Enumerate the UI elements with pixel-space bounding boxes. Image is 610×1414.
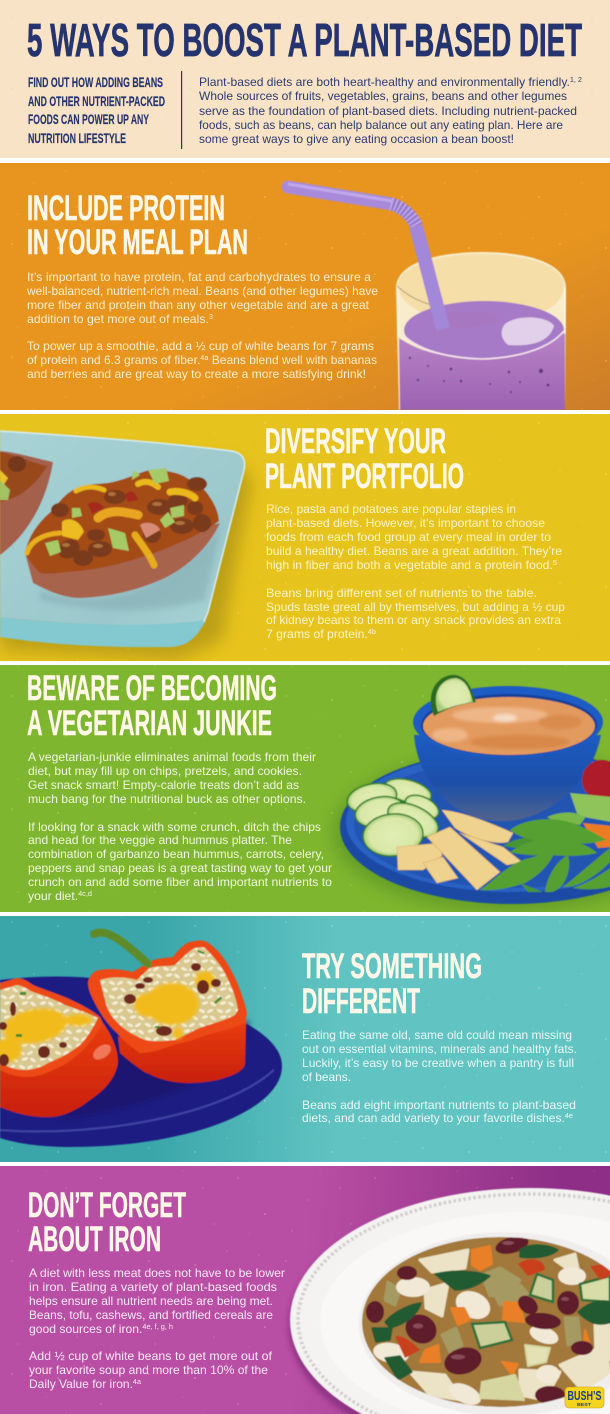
- right sweet potato: [25, 468, 220, 598]
- body text: combination of garbanzo bean hummus, carrots, celery,: [28, 848, 324, 861]
- body text: good sources of iron.: [29, 1323, 137, 1336]
- heading: A VEGETARIAN JUNKIE: [27, 704, 272, 743]
- panel: beware of becoming a vegetarian junkie: [0, 665, 610, 912]
- body text: Spuds taste great all by themselves, but adding a ½ cup: [266, 601, 565, 614]
- heading: PLANT PORTFOLIO: [265, 457, 464, 496]
- body text: A diet with less meat does not have to be lower: [29, 1267, 285, 1280]
- body text: Luckily, it’s easy to be creative when a pantry is full: [302, 1057, 574, 1070]
- body text: 4b: [368, 629, 376, 636]
- body text: and head for the veggie and hummus platter. The: [28, 834, 292, 847]
- body text: of beans.: [302, 1071, 351, 1084]
- body text: more fiber and protein than any other vegetable and are a great: [27, 299, 370, 312]
- left sweet potato: [0, 451, 53, 555]
- body text: diets, and can add variety to your favorite dishes.: [302, 1112, 554, 1125]
- cucumber slices: [345, 774, 443, 859]
- right pepper: [88, 940, 247, 1083]
- panel: try something different: [0, 916, 610, 1162]
- heading: DIFFERENT: [302, 982, 420, 1021]
- body text: [28, 751, 332, 903]
- panel: header: [0, 0, 610, 158]
- intro text: 1, 2: [570, 77, 582, 84]
- body text: Rice, pasta and potatoes are popular staples in: [266, 503, 516, 516]
- heading: [27, 669, 277, 743]
- body text: 4a: [133, 1379, 141, 1386]
- panel: include protein: [0, 163, 610, 410]
- body text: 3: [209, 314, 213, 321]
- panel: don't forget about iron: [0, 1166, 610, 1414]
- subheading: [28, 74, 165, 146]
- body text: Daily Value for iron.: [29, 1378, 129, 1391]
- body text: [302, 1029, 577, 1125]
- body text: of kidney beans to them or any snack provides an extra: [266, 614, 562, 627]
- intro text: serve as the foundation of plant-based diets. Including nutrient-packed: [199, 105, 577, 118]
- pepper stem: [94, 932, 148, 964]
- logo: Bush's Best: BEST: [577, 1402, 591, 1407]
- body text: To power up a smoothie, add a ½ cup of white beans for 7 grams: [27, 340, 374, 353]
- snap peas, celery, carrot and tomato: [480, 760, 610, 892]
- body text: your diet.: [28, 890, 76, 903]
- cucumber garnish: [431, 675, 476, 716]
- body text: 4c,d: [78, 891, 92, 898]
- body text: [26, 271, 378, 381]
- body text: If looking for a snack with some crunch, ditch the chips: [28, 821, 321, 834]
- body text: 4e: [565, 1113, 573, 1120]
- body text: Beans, tofu, cashews, and fortified cereals are: [29, 1309, 273, 1322]
- body text: Beans add eight important nutrients to plant-based: [302, 1099, 576, 1112]
- heading: [28, 1186, 186, 1259]
- intro text: [199, 76, 582, 146]
- illustration: stuffed sweet potatoes on plate: [0, 431, 252, 660]
- illustration: hummus bowl and vegetable platter: [332, 675, 610, 912]
- illustration: berry smoothie with straw: [288, 184, 566, 410]
- left pepper: [0, 978, 118, 1117]
- body text: high in fiber and both a vegetable and a protein food.: [266, 559, 537, 572]
- body text: much bang for the nutritional buck as other options.: [28, 793, 306, 806]
- body text: diet, but may fill up on chips, pretzels, and cookies.: [28, 765, 302, 778]
- panel: diversify your plant portfolio: [0, 414, 610, 661]
- body text: 4a: [200, 355, 208, 362]
- body text: [29, 1267, 285, 1391]
- body text: foods from each food group at every meal in order to: [266, 531, 551, 544]
- intro text: Whole sources of fruits, vegetables, grains, beans and other legumes: [199, 90, 567, 103]
- heading: [27, 189, 248, 262]
- intro text: foods, such as beans, can help balance out any eating plan. Here are: [199, 119, 563, 132]
- subheading: FOODS CAN POWER UP ANY: [28, 111, 149, 127]
- soup: [362, 1233, 610, 1409]
- heading: IN YOUR MEAL PLAN: [27, 223, 248, 262]
- subheading: FIND OUT HOW ADDING BEANS: [28, 74, 163, 90]
- heading: TRY SOMETHING: [302, 947, 482, 986]
- heading: [302, 947, 482, 1021]
- body text: Add ½ cup of white beans to get more out of: [29, 1350, 273, 1363]
- intro text: some great ways to give any eating occasion a bean boost!: [199, 133, 514, 146]
- body text: A vegetarian-junkie eliminates animal foods from their: [28, 751, 316, 764]
- body text: Beans blend well with bananas: [208, 354, 377, 367]
- hummus bowl: [413, 686, 603, 821]
- body text: plant-based diets. However, it’s important to choose: [266, 517, 545, 530]
- intro text: Plant-based diets are both heart-healthy and environmentally friendly.: [199, 76, 555, 89]
- body text: your favorite soup and more than 10% of the: [29, 1364, 268, 1377]
- heading: INCLUDE PROTEIN: [27, 189, 225, 228]
- body text: build a healthy diet. Beans are a great addition. They’re: [266, 545, 562, 558]
- illustration: soup bowl: [288, 1188, 610, 1414]
- subheading: NUTRITION LIFESTYLE: [28, 130, 126, 146]
- heading: DON’T FORGET: [28, 1186, 186, 1225]
- body text: Get snack smart! Empty-calorie treats don’t add as: [28, 779, 299, 792]
- body text: and berries and are great way to create a more satisfying drink!: [27, 368, 366, 381]
- body text: Beans bring different set of nutrients to the table.: [266, 587, 537, 600]
- subheading: AND OTHER NUTRIENT-PACKED: [28, 93, 165, 109]
- body text: addition to get more out of meals.: [27, 313, 199, 326]
- illustration: stuffed peppers on plate: [0, 932, 282, 1147]
- heading: ABOUT IRON: [28, 1220, 161, 1259]
- body text: 7 grams of protein.: [266, 628, 363, 641]
- body text: Eating the same old, same old could mean missing: [302, 1029, 572, 1042]
- body text: in iron. Eating a variety of plant-based foods: [29, 1281, 277, 1294]
- heading: BEWARE OF BECOMING: [27, 669, 277, 708]
- body text: of protein and 6.3 grams of fiber.: [27, 354, 194, 367]
- body text: peppers and snap peas is a great tasting way to get your: [28, 862, 332, 875]
- body text: helps ensure all nutrient needs are being met.: [29, 1295, 273, 1308]
- heading: [265, 422, 464, 496]
- body text: out on essential vitamins, minerals and healthy fats.: [302, 1043, 577, 1056]
- pita chips: [397, 810, 522, 890]
- body text: 4e, f, g, h: [142, 1324, 173, 1331]
- body text: well-balanced, nutrient-rich meal. Beans (and other legumes) have: [26, 285, 378, 298]
- body text: It’s important to have protein, fat and carbohydrates to ensure a: [27, 271, 372, 284]
- body text: crunch on and add some fiber and important nutrients to: [28, 876, 332, 889]
- body text: 5: [553, 560, 557, 567]
- body text: [266, 503, 565, 641]
- logo: Bush's Best: [565, 1387, 604, 1408]
- heading: DIVERSIFY YOUR: [265, 422, 446, 461]
